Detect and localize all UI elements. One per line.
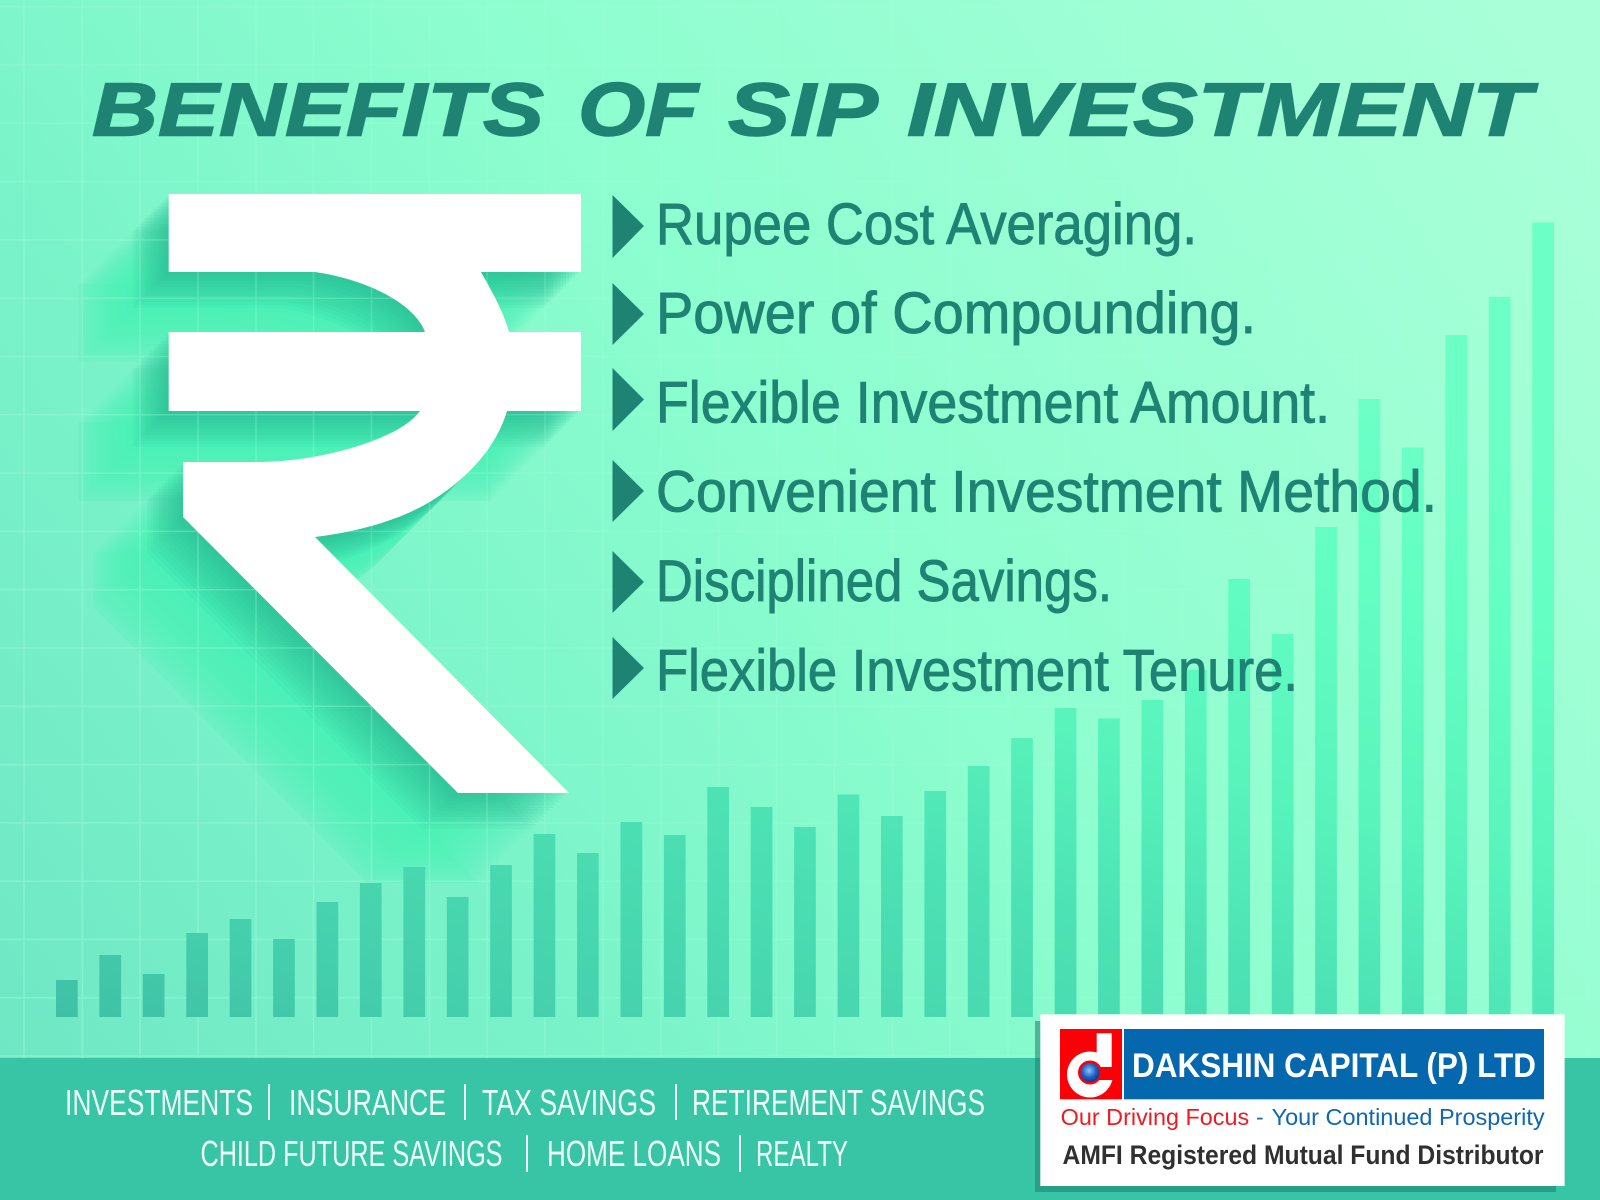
footer services text: REALTY xyxy=(756,1133,848,1174)
benefit 4: Convenient Investment Method. xyxy=(656,460,1437,524)
title: OF xyxy=(578,68,701,152)
tagline: Our Driving Focus xyxy=(1061,1104,1249,1130)
benefit 2: Power of Compounding. xyxy=(656,281,1256,346)
bar chart xyxy=(56,222,1554,1017)
logo icon xyxy=(1060,1029,1122,1099)
footer services text: HOME LOANS xyxy=(547,1133,721,1174)
rupee long shadow xyxy=(79,196,578,883)
company name banner: DAKSHIN CAPITAL (P) LTD xyxy=(1132,1047,1536,1085)
title: INVESTMENT xyxy=(907,68,1539,152)
benefit 3: Flexible Investment Amount. xyxy=(656,370,1330,436)
footer band xyxy=(0,1058,1600,1200)
benefits list xyxy=(612,192,1437,704)
AMFI line: AMFI Registered Mutual Fund Distributor xyxy=(1062,1140,1544,1170)
title: SIP xyxy=(728,68,879,152)
tagline: - xyxy=(1256,1104,1264,1130)
footer services text: CHILD FUTURE SAVINGS xyxy=(200,1133,502,1174)
rupee symbol xyxy=(169,194,581,793)
logo card xyxy=(1035,1014,1565,1192)
footer services text xyxy=(65,1082,985,1174)
benefit 6: Flexible Investment Tenure. xyxy=(656,638,1298,704)
company name banner xyxy=(1124,1029,1544,1099)
benefit 1: Rupee Cost Averaging. xyxy=(656,192,1197,257)
footer services text: INSURANCE xyxy=(289,1082,446,1123)
footer services text: RETIREMENT SAVINGS xyxy=(692,1082,985,1123)
title xyxy=(92,68,1539,152)
footer services text: INVESTMENTS xyxy=(65,1082,253,1123)
footer services text: TAX SAVINGS xyxy=(482,1082,656,1123)
title: BENEFITS xyxy=(92,68,544,152)
tagline xyxy=(1061,1104,1545,1130)
benefit 5: Disciplined Savings. xyxy=(656,549,1112,614)
tagline: Your Continued Prosperity xyxy=(1272,1104,1545,1130)
